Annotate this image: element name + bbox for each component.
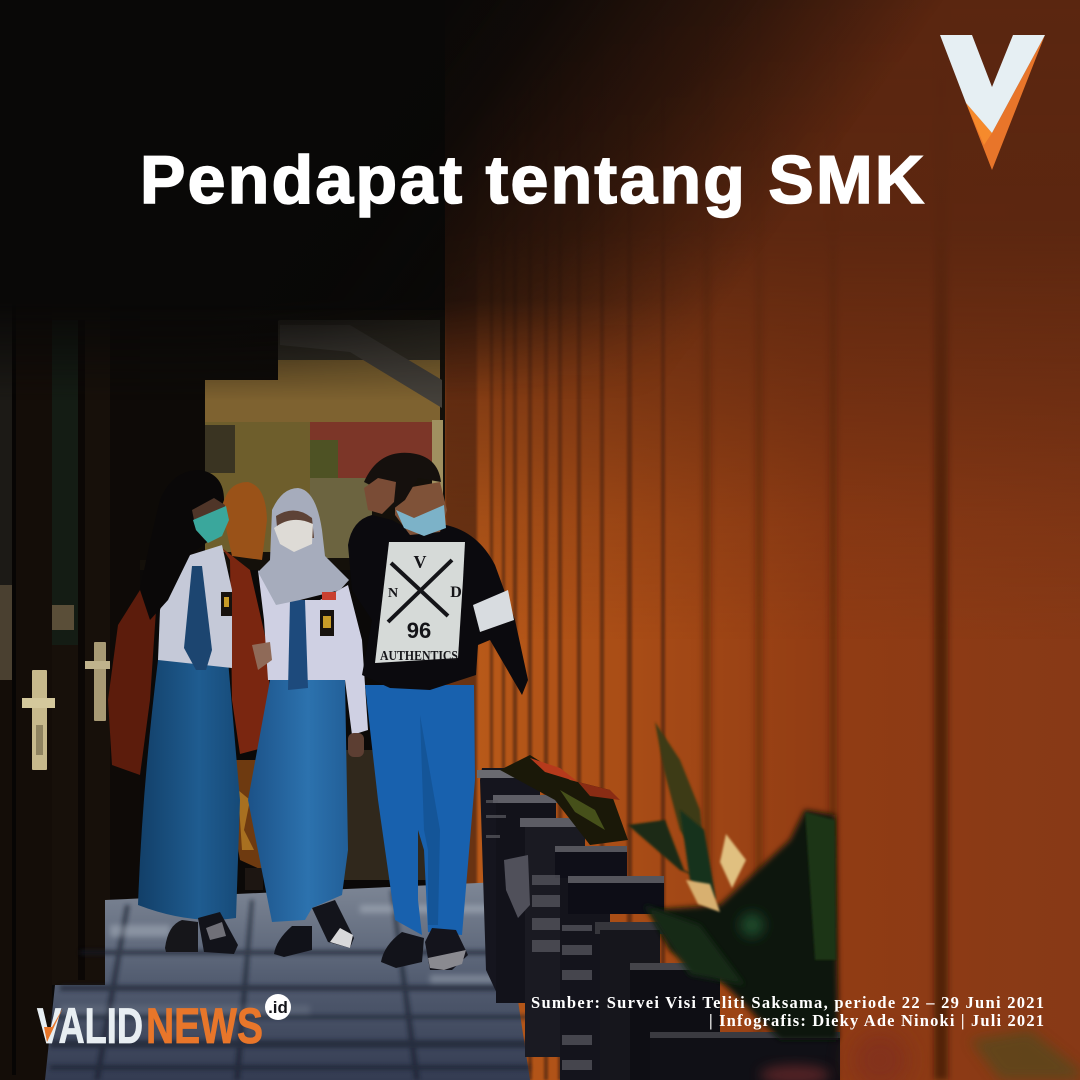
student: left girl — [108, 470, 274, 954]
sweater print panel: D — [450, 584, 462, 601]
hair — [364, 453, 441, 510]
face — [192, 498, 225, 540]
hand on skirt — [348, 733, 364, 757]
logo: Validnews.id: VALID — [37, 998, 143, 1054]
student: boy — [348, 453, 528, 970]
left doors — [0, 228, 140, 1080]
carved brick details — [486, 800, 592, 1070]
mask — [274, 520, 313, 552]
door handle right — [85, 642, 110, 721]
floor tiles — [45, 882, 530, 1080]
logo: Validnews.id: NEWS — [146, 998, 263, 1054]
print cross — [388, 560, 452, 622]
print letters: V — [414, 552, 426, 572]
skirt — [138, 660, 240, 920]
mask — [396, 505, 446, 536]
mask — [193, 506, 229, 543]
shoes — [381, 932, 424, 968]
tie — [288, 600, 308, 690]
shirt — [258, 570, 368, 735]
dark top-left gradient overlay — [0, 0, 912, 392]
badge — [221, 592, 232, 616]
flag pin — [322, 592, 336, 600]
hair — [140, 470, 224, 620]
shoes — [274, 926, 312, 957]
foreground blurred plant — [628, 722, 1080, 1080]
title: Pendapat tentang SMK — [140, 142, 924, 218]
hijab — [258, 488, 349, 605]
logo: Validnews.id: .id — [268, 998, 288, 1017]
back corridor — [140, 310, 450, 880]
skirt — [248, 680, 348, 922]
tie — [184, 566, 212, 670]
source credit: | Infografis: Dieky Ade Ninoki | Juli 2021 — [709, 1011, 1044, 1030]
source credit — [531, 993, 1044, 1030]
row of stone planters — [477, 768, 840, 1080]
badge — [320, 610, 334, 636]
source credit: Sumber: Survei Visi Teliti Saksama, periode 22 – 29 Juni 2021 — [531, 993, 1044, 1012]
sweater — [348, 515, 528, 695]
hand on cardigan — [252, 642, 272, 670]
white sleeve band — [473, 590, 514, 632]
head — [395, 482, 447, 535]
sweater print panel: 96 — [407, 618, 431, 643]
sweater print panel: AUTHENTICS — [380, 649, 458, 664]
door handle left — [22, 670, 55, 770]
trousers — [365, 685, 475, 935]
sweater print panel — [375, 542, 465, 664]
red cardigan — [108, 560, 160, 775]
sweater print panel: N — [388, 586, 398, 601]
small plants on planters — [500, 755, 628, 845]
student: middle girl — [248, 488, 368, 957]
logo: V mark — [940, 35, 1045, 170]
brown top gradient overlay — [445, 0, 1080, 640]
hand — [364, 478, 396, 514]
shirt — [158, 545, 232, 668]
logo: Validnews.id — [37, 994, 291, 1054]
shoes — [165, 920, 198, 952]
orange column wall — [445, 0, 1080, 1080]
face — [276, 510, 314, 538]
background person in orange hijab — [222, 482, 267, 890]
